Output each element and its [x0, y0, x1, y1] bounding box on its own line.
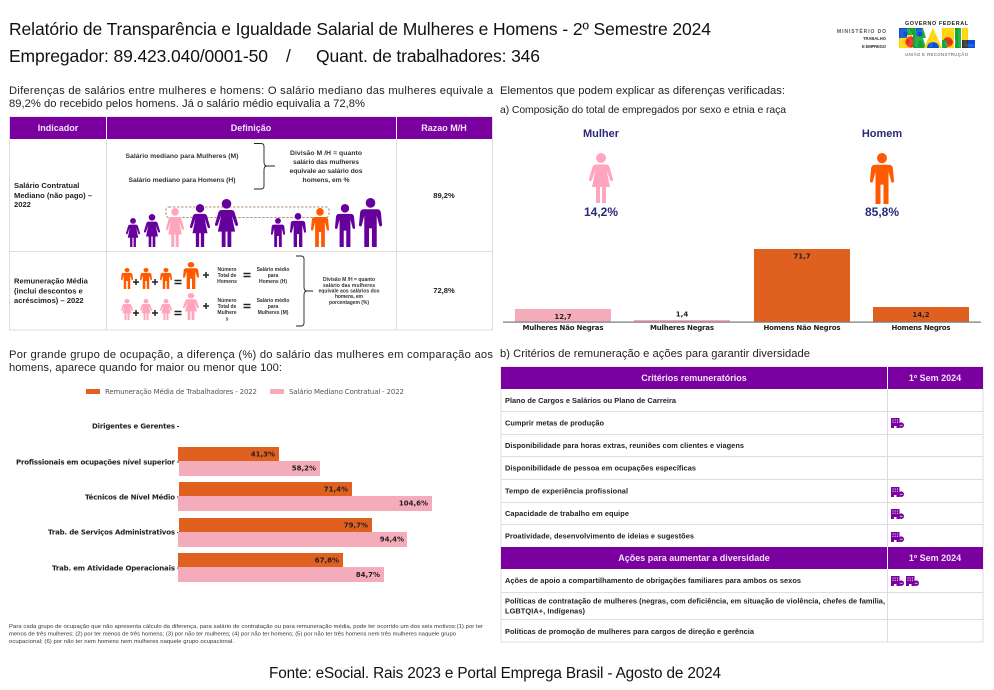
definition: salário mediano [126, 144, 363, 189]
bar chart: diferença salarial por ocupação: 79,7% [344, 522, 368, 530]
icons: critérios adotados [891, 418, 904, 542]
brace and division text: porcentagem (%) [329, 300, 369, 306]
indicator: salário contratual mediano: Salário Contratual [14, 181, 79, 190]
bar chart: composição por sexo e raça: 14,2 [912, 311, 930, 319]
rows: ações: Políticas de promoção de mulheres para cargos de direção e gerência [505, 627, 755, 636]
indicator: remuneração média: acréscimos) – 2022 [14, 296, 84, 305]
rows: ações [505, 576, 885, 636]
panel: tabela de critérios [501, 367, 983, 642]
logo: governo federal: UNIÃO E RECONSTRUÇÃO [905, 52, 969, 57]
bar chart: diferença salarial por ocupação: 67,8% [315, 556, 339, 564]
logo: ministério: MINISTÉRIO DO [837, 27, 886, 35]
bar chart: composição por sexo e raça: 71,7 [793, 252, 811, 260]
rows: ações: Ações de apoio a compartilhamento de obrigações familiares para ambos os sexos [505, 576, 801, 585]
definition: remuneração homens: Salário médio [257, 267, 289, 273]
bar chart: diferença salarial por ocupação: 71,4% [324, 486, 348, 494]
text block: grande grupo de ocupação [9, 349, 493, 374]
definition: salário mediano: homens, em % [302, 177, 350, 184]
rows: critérios: Cumprir metas de produção [505, 418, 604, 428]
definition: salário mediano: Salário mediano para Mulheres (M) [126, 153, 238, 160]
header: critérios remuneratórios: Critérios remuneratórios [641, 373, 747, 383]
logo: governo federal: GOVERNO FEDERAL [905, 21, 969, 27]
text block: elementos: Elementos que podem explicar as diferenças verificadas: [500, 85, 785, 97]
rows: ações: Políticas de contratação de mulheres (negras, com deficiência, em situação de violência, chefes de família, [505, 596, 885, 606]
bar chart: diferença salarial por ocupação: Trab. de Serviços Administrativos [48, 528, 175, 536]
definition: remuneração homens: Número [218, 267, 236, 273]
text block: diferenças de salários [9, 85, 494, 110]
employer line [9, 46, 540, 66]
table header [10, 117, 492, 139]
logo: ministério [837, 27, 887, 49]
definition: remuneração homens [121, 262, 289, 289]
bar chart: composição por sexo e raça: Homens Não Negros [764, 324, 840, 332]
bar chart: composição por sexo e raça: Mulheres Não Negras [522, 324, 604, 332]
definition: remuneração mulheres [121, 293, 289, 322]
definition: remuneração homens: Homens [217, 279, 237, 285]
panel: homem: Homem [862, 128, 902, 140]
chart legend: Salário Mediano Contratual - 2022 [289, 388, 404, 396]
icon: homem [870, 153, 894, 204]
table header: Razao M/H [421, 123, 467, 133]
indicator: remuneração média: (inclui descontos e [14, 286, 83, 296]
brace and division text: Divisão M /H = quanto [323, 277, 375, 283]
text block: diferenças de salários: Diferenças de salários entre mulheres e homens: O salário mediano das mulheres equivale a [9, 85, 494, 97]
table header: Indicador [38, 123, 79, 133]
rows: critérios: Plano de Cargos e Salários ou Plano de Carreira [505, 396, 677, 405]
definition: remuneração homens: Total de [218, 273, 237, 279]
rows: critérios: Capacidade de trabalho em equipe [505, 509, 629, 518]
header: critérios remuneratórios: 1º Sem 2024 [909, 373, 961, 383]
bar chart: diferença salarial por ocupação: Trab. em Atividade Operacionais [52, 564, 175, 572]
header: ações para diversidade: 1º Sem 2024 [909, 553, 961, 563]
indicator: salário contratual mediano: 2022 [14, 200, 31, 209]
bar chart: diferença salarial por ocupação: 58,2% [292, 464, 316, 472]
indicator: remuneração média: Remuneração Média [14, 276, 89, 286]
rows: critérios: Tempo de experiência profissional [505, 486, 628, 496]
indicator: remuneração média [14, 276, 89, 305]
source footer: Fonte: eSocial. Rais 2023 e Portal Emprega Brasil - Agosto de 2024 [269, 665, 721, 682]
panel: homem: 85,8% [865, 205, 899, 219]
brace and division text: equivale aos salários dos [318, 288, 380, 294]
definition: remuneração mulheres: Mulhere [217, 310, 237, 316]
logo: governo federal: BRASIL [899, 23, 975, 53]
rows: critérios: Disponibilidade para horas extras, reuniões com clientes e viagens [505, 441, 744, 450]
footnote: menos de três mulheres; (2) por ter menos de três homens; (3) por não ter mulheres; (4) por não ter homens; (5) por não ter três homens nem três mulheres naquele grupo [9, 632, 457, 638]
value: razão mediana: 89,2% [433, 191, 455, 200]
indicator: salário contratual mediano: Mediano (não pago) – [14, 191, 92, 200]
header: ações para diversidade: Ações para aumentar a diversidade [618, 553, 770, 563]
icon: mulher [589, 153, 613, 203]
rows: ações: LGBTQIA+, Indígenas) [505, 606, 586, 616]
text block: elementos [500, 85, 786, 116]
logo: governo federal [899, 21, 975, 57]
employer line: Quant. de trabalhadores: 346 [316, 46, 540, 66]
rows: critérios: Proatividade, desenvolvimento de ideias e sugestões [505, 532, 694, 540]
bar chart: composição por sexo e raça: 1,4 [676, 310, 688, 318]
definition: remuneração homens: para [268, 273, 278, 279]
icons: ações adotadas [891, 576, 919, 586]
panel: tabela de indicadores [10, 117, 492, 330]
footnote: Para cada grupo de ocupação que não apresenta cálculo da diferença, para salário de contratação ou para remuneração média, pode ter ocorrido um dos seis motivos:(1) por ter [9, 624, 483, 630]
definition: remuneração mulheres: s [226, 316, 229, 322]
text block: diferenças de salários: 89,2% do recebido pelos homens. Já o salário médio equivalia a 72,8% [9, 98, 365, 110]
bar chart: composição por sexo e raça: Homens Negros [892, 324, 950, 332]
dashed median highlight [166, 207, 329, 218]
rows: critérios: Disponibilidade de pessoa em ocupações específicas [505, 464, 696, 472]
panel: mulher [583, 128, 620, 219]
definition: salário mediano: salário das mulheres [293, 159, 359, 166]
panel: mulher: Mulher [583, 128, 620, 140]
bar chart: diferença salarial por ocupação: 84,7% [356, 571, 380, 579]
definition: remuneração mulheres: Total de [218, 304, 237, 310]
text block: grande grupo de ocupação: Por grande grupo de ocupação, a diferença (%) do salário das mulheres em comparação aos [9, 349, 493, 361]
header: critérios remuneratórios [501, 367, 983, 389]
text block: grande grupo de ocupação: homens, aparece quando for maior ou menor que 100: [9, 362, 282, 374]
definition: remuneração mulheres: Salário médio [257, 298, 289, 304]
employer line: Empregador: 89.423.040/0001-50 [9, 46, 268, 66]
icons: pessoas ordenadas por salário [126, 198, 382, 247]
table header: Definição [231, 123, 272, 133]
definition: remuneração homens: Homens (H) [259, 279, 287, 285]
bar chart: diferença salarial por ocupação [16, 422, 432, 582]
footnote: ocupacional; (6) por não ter nem homens nem mulheres naquele grupo ocupacional. [9, 639, 234, 645]
brace and division text: salário das mulheres [323, 283, 375, 289]
bar chart: diferença salarial por ocupação: 41,3% [251, 450, 275, 458]
footnote [9, 624, 483, 645]
logo: ministério: E EMPREGO [862, 44, 887, 49]
bar chart: composição por sexo e raça: 12,7 [554, 313, 572, 321]
indicator: salário contratual mediano [14, 181, 92, 209]
logo: ministério: TRABALHO [863, 36, 887, 41]
text block: elementos: a) Composição do total de empregados por sexo e etnia e raça [500, 105, 786, 116]
bar chart: composição por sexo e raça [503, 249, 981, 332]
bar chart: composição por sexo e raça: Mulheres Negras [650, 324, 714, 332]
bar chart: diferença salarial por ocupação: Profissionais em ocupações nível superior [16, 458, 176, 466]
bar chart: diferença salarial por ocupação: 104,6% [399, 500, 428, 508]
chart legend: Remuneração Média de Trabalhadores - 2022 [105, 388, 257, 396]
definition: salário mediano: Salário mediano para Homens (H) [128, 177, 236, 184]
definition: salário mediano: equivale ao salário dos [290, 168, 363, 175]
definition: remuneração mulheres: para [268, 304, 278, 310]
title: Relatório de Transparência e Igualdade Salarial de Mulheres e Homens - 2º Semestre 2024 [9, 19, 711, 39]
definition: remuneração mulheres: Número [218, 298, 236, 304]
bar chart: diferença salarial por ocupação: Técnicos de Nível Médio [85, 494, 175, 502]
rows: critérios [505, 396, 744, 540]
bar chart: diferença salarial por ocupação: 94,4% [380, 536, 404, 544]
panel: homem [862, 128, 902, 219]
definition: salário mediano: Divisão M /H = quanto [290, 150, 362, 157]
bar chart: diferença salarial por ocupação: Dirigentes e Gerentes [92, 422, 175, 430]
brace and division text [296, 256, 380, 326]
employer line: / [286, 46, 291, 66]
header: ações para diversidade [501, 547, 983, 569]
definition: remuneração mulheres: Mulheres (M) [258, 310, 289, 316]
text block: critérios e ações: b) Critérios de remuneração e ações para garantir diversidade [500, 348, 810, 360]
panel: mulher: 14,2% [584, 205, 618, 219]
chart legend [86, 388, 404, 396]
brace and division text: homens, em [335, 294, 364, 300]
value: razão média: 72,8% [433, 286, 455, 295]
